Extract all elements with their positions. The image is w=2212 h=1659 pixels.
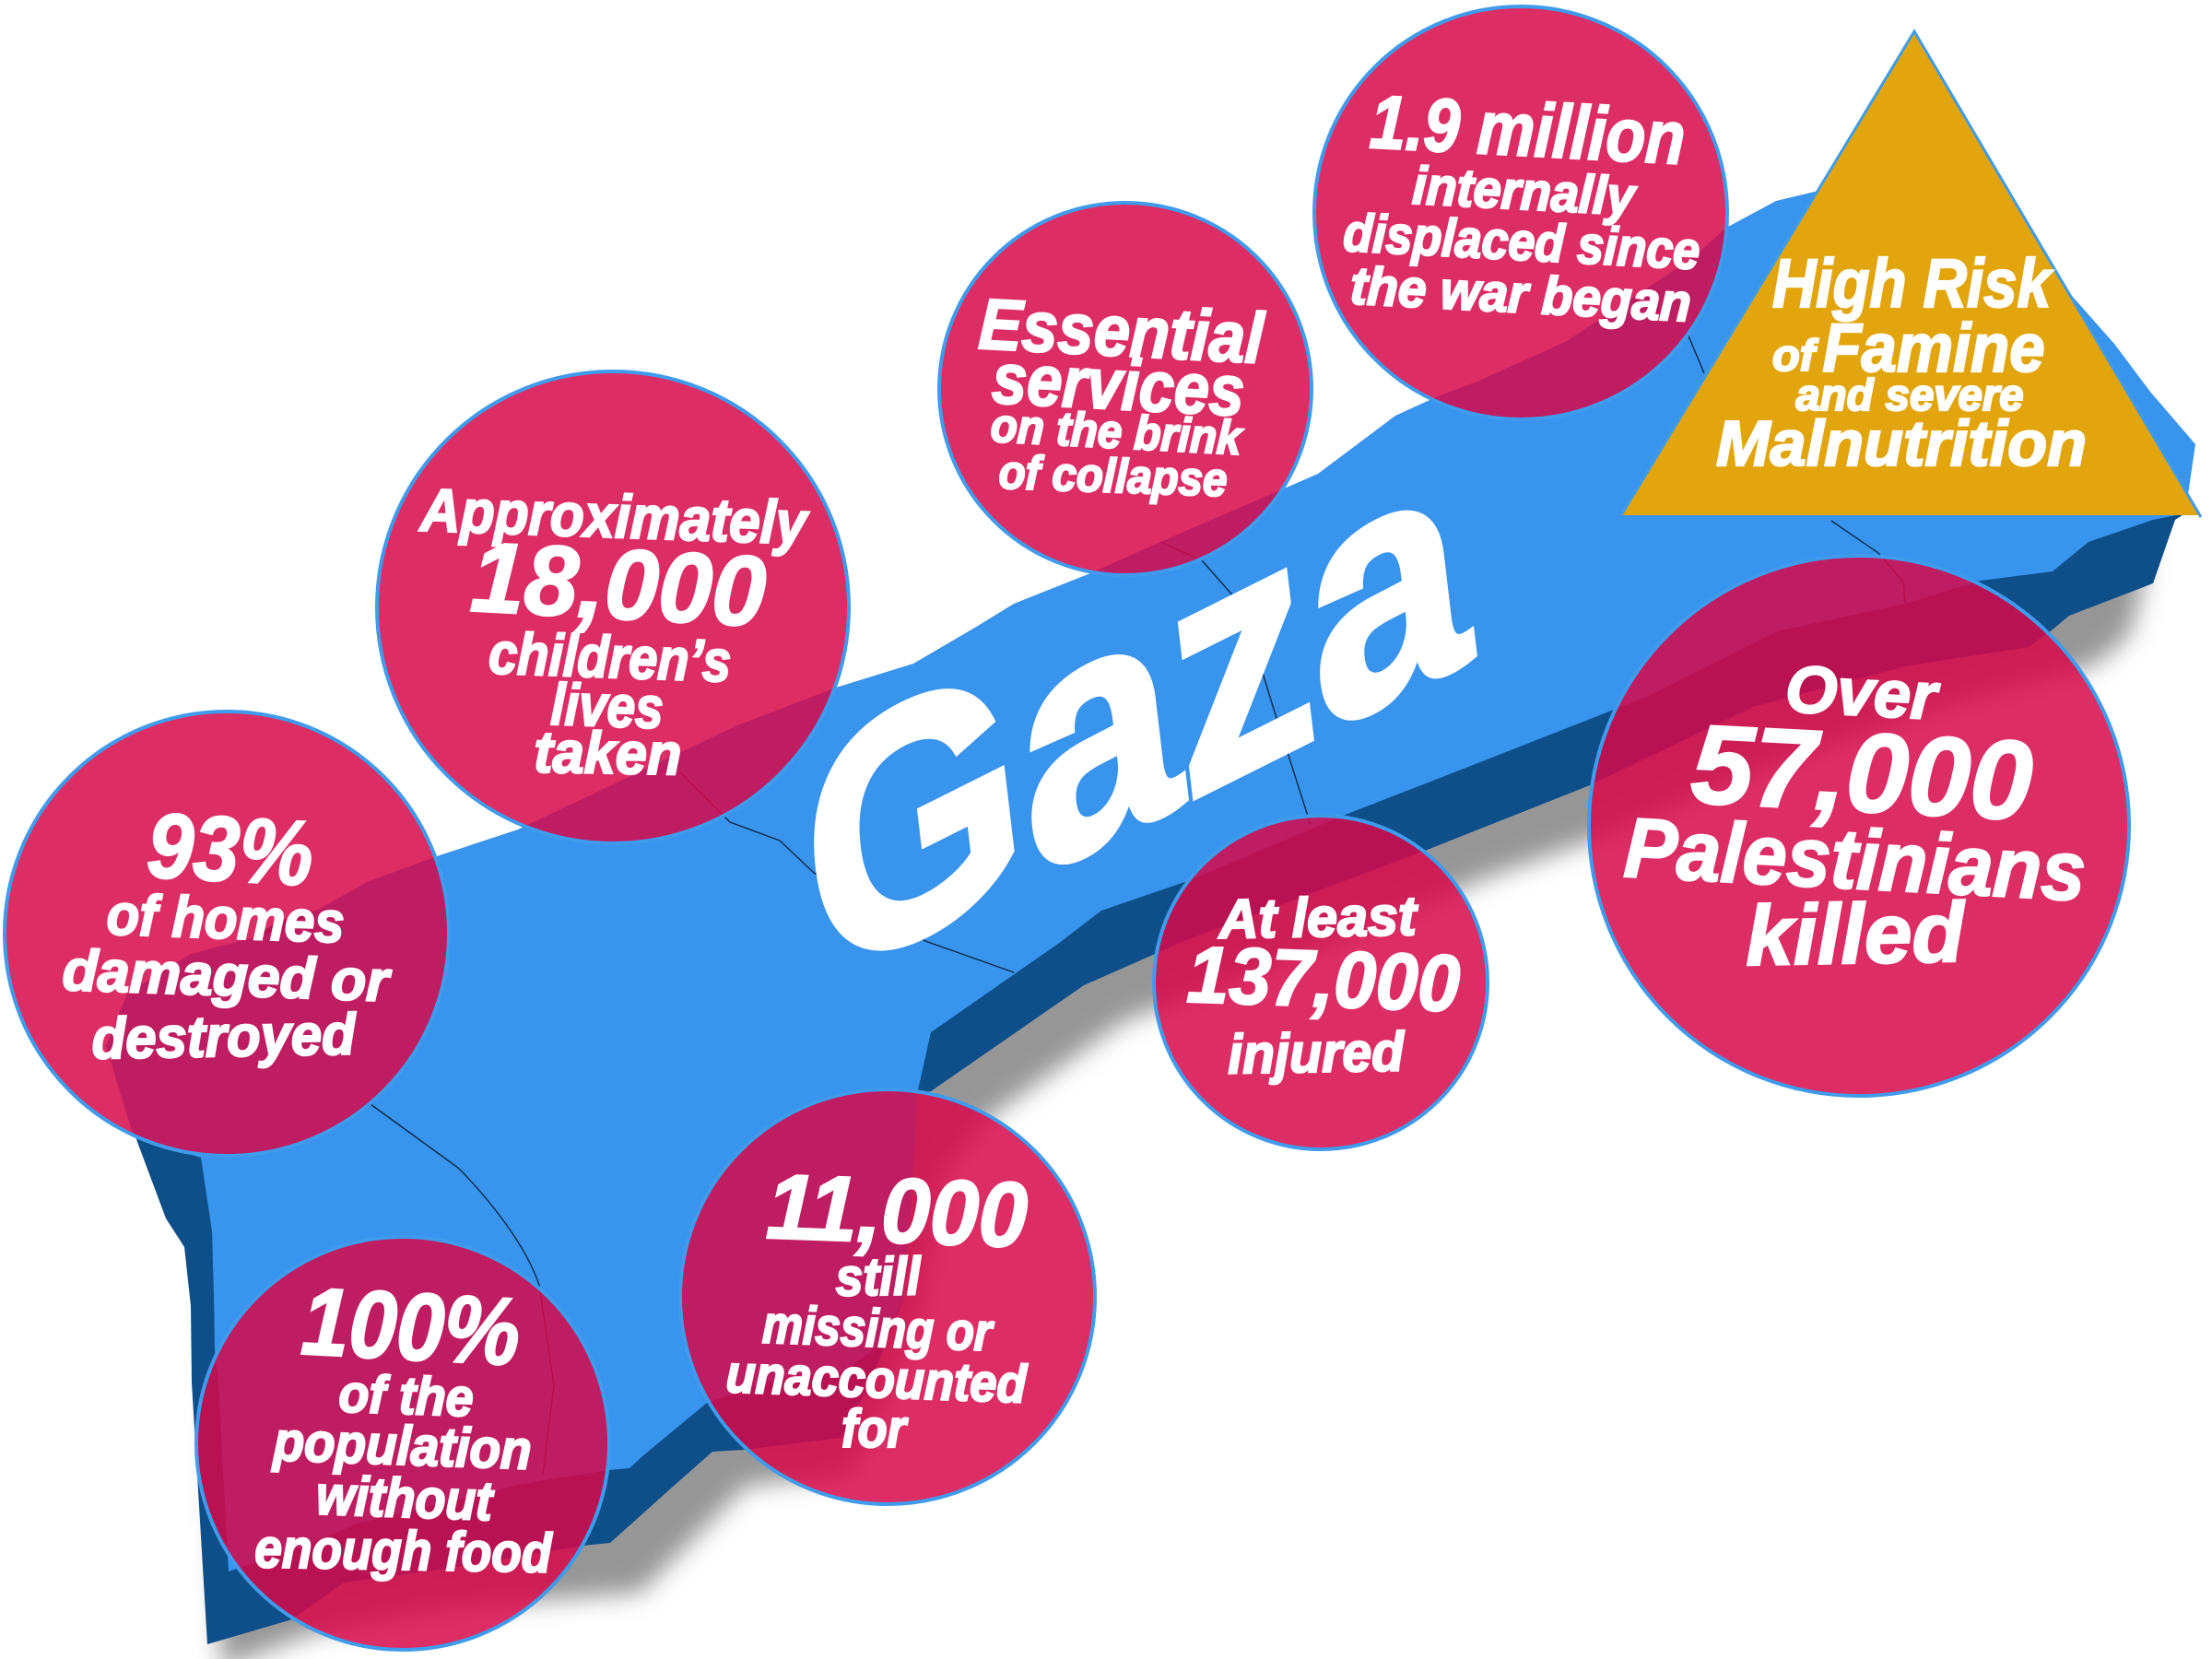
stat circle: 93% of homes: destroyed	[91, 1002, 358, 1071]
stat circle: 100% without enough food: enough food	[254, 1517, 553, 1584]
warning triangle: famine: of	[1772, 332, 1818, 381]
stat circle: 100% without enough food	[196, 1237, 609, 1650]
warning triangle: famine: Malnutrition	[1716, 407, 2087, 479]
stat circle: 137,000 injured: At least	[1217, 885, 1419, 950]
stat circle: 1.9 million displaced	[1314, 6, 1727, 419]
stat circle: 11,000 missing	[680, 1089, 1095, 1504]
warning triangle: famine	[1621, 31, 2201, 517]
stat circle: essential services: of collapse	[998, 446, 1229, 507]
stat circle: 11,000 missing: 11,000	[765, 1155, 1030, 1267]
stat circle: 11,000 missing: missing or	[761, 1295, 995, 1362]
stat circle: essential services	[939, 203, 1312, 575]
warning triangle: famine: Famine	[1823, 310, 2044, 386]
stat circle: 57,000 killed: 57,000	[1688, 700, 2036, 844]
stat circle: 18,000 children: Approximately	[418, 476, 810, 557]
stat circle: 93% of homes: 93%	[145, 794, 316, 906]
stat circle: 1.9 million displaced: the war began	[1349, 255, 1692, 334]
stat circle: 137,000 injured: injured	[1228, 1020, 1406, 1086]
governorate borders	[371, 334, 1905, 1475]
stat circle: 18,000 children: children’s	[488, 619, 732, 695]
stat circle: 18,000 children	[377, 371, 849, 843]
stat circle: 100% without enough food: 100%	[299, 1268, 523, 1386]
stat circle: 1.9 million displaced: internally	[1411, 156, 1639, 227]
stat circle: 93% of homes	[5, 712, 449, 1156]
stat circle: essential services: Essential	[977, 283, 1266, 379]
stat circle: 100% without enough food: of the	[338, 1363, 475, 1429]
warning triangle: famine: and severe	[1795, 371, 2024, 420]
stat circle: 11,000 missing: still	[835, 1246, 923, 1308]
stat circle: 93% of homes: of homes	[106, 883, 346, 955]
map shadow	[212, 553, 2147, 1659]
stat circle: 137,000 injured: 137,000	[1185, 930, 1462, 1029]
stat circle: 11,000 missing: unaccounted	[725, 1344, 1029, 1415]
stat circle: 57,000 killed: Over	[1783, 653, 1942, 734]
stat circle: 18,000 children: lives	[550, 671, 665, 741]
stat circle: 18,000 children: taken	[534, 719, 682, 787]
map side (extrusion)	[106, 461, 2185, 1644]
stat circle: essential services: services	[990, 337, 1247, 431]
map title: Gaza: Gaza	[786, 365, 1483, 1053]
stat circle: 57,000 killed	[1589, 556, 2129, 1096]
stat circle: 137,000 injured	[1154, 816, 1488, 1149]
stat circle: 93% of homes: damaged or	[62, 938, 393, 1014]
stat circle: 18,000 children: 18,000	[468, 521, 769, 647]
stat circle: 100% without enough food: without	[315, 1465, 496, 1532]
stat circle: essential services: on the brink	[990, 399, 1245, 465]
stat circle: 11,000 missing: for	[841, 1399, 909, 1459]
warning triangle: famine: High Risk	[1772, 245, 2053, 322]
stat circle: 100% without enough food: population	[271, 1410, 533, 1481]
stat circle: 1.9 million displaced: displaced since	[1342, 203, 1701, 281]
stat circle: 1.9 million displaced: 1.9 million	[1368, 80, 1688, 181]
stat circle: 57,000 killed: killed	[1745, 886, 1967, 983]
stat circle: 57,000 killed: Palestinians	[1622, 801, 2088, 919]
